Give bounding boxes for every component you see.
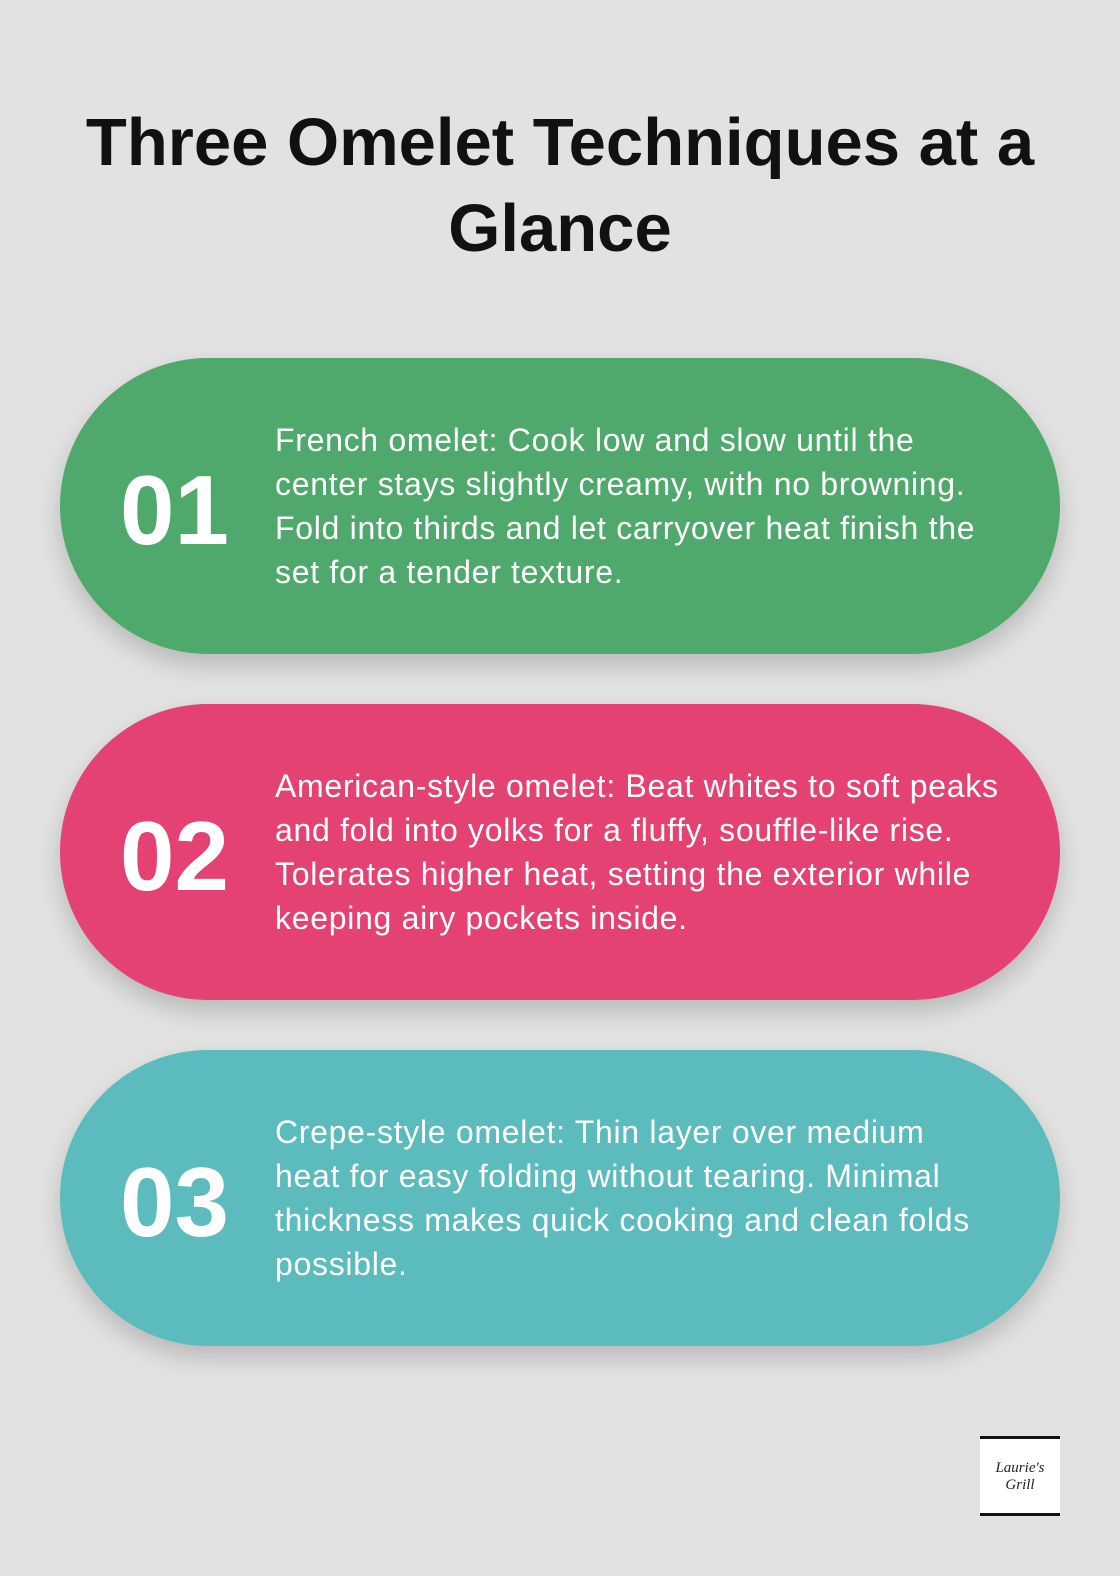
text: crepe: Crepe-style omelet: Thin layer over medium bbox=[275, 1114, 924, 1150]
text: french bbox=[275, 422, 975, 590]
text: crepe: heat for easy folding without tearing. Minimal bbox=[275, 1158, 940, 1194]
number 03: 03 bbox=[120, 1147, 229, 1257]
panel: 01 french omelet bbox=[60, 358, 1060, 654]
panel: 02 american omelet bbox=[60, 704, 1060, 1000]
number 01: 01 bbox=[120, 455, 229, 565]
title: Three Omelet Techniques at a bbox=[86, 105, 1034, 180]
text: american: American-style omelet: Beat whites to soft peaks bbox=[275, 768, 999, 804]
text: french: center stays slightly creamy, with no browning. bbox=[275, 466, 965, 502]
text: american: and fold into yolks for a fluffy, souffle-like rise. bbox=[275, 812, 954, 848]
title bbox=[86, 105, 1035, 266]
logo bbox=[980, 1436, 1060, 1516]
text: crepe bbox=[275, 1114, 970, 1282]
text: french: set for a tender texture. bbox=[275, 554, 623, 590]
number 02: 02 bbox=[120, 801, 229, 911]
panel: 03 crepe omelet bbox=[60, 1050, 1060, 1346]
text: crepe: possible. bbox=[275, 1246, 408, 1282]
title: Glance bbox=[448, 191, 672, 266]
logo: Laurie's bbox=[995, 1460, 1045, 1476]
text: french: Fold into thirds and let carryover heat finish the bbox=[275, 510, 975, 546]
text: american: Tolerates higher heat, setting the exterior while bbox=[275, 856, 971, 892]
logo: Grill bbox=[1005, 1477, 1035, 1493]
text: french: French omelet: Cook low and slow until the bbox=[275, 422, 914, 458]
text: american: keeping airy pockets inside. bbox=[275, 900, 688, 936]
text: crepe: thickness makes quick cooking and clean folds bbox=[275, 1202, 970, 1238]
text: american bbox=[275, 768, 999, 936]
